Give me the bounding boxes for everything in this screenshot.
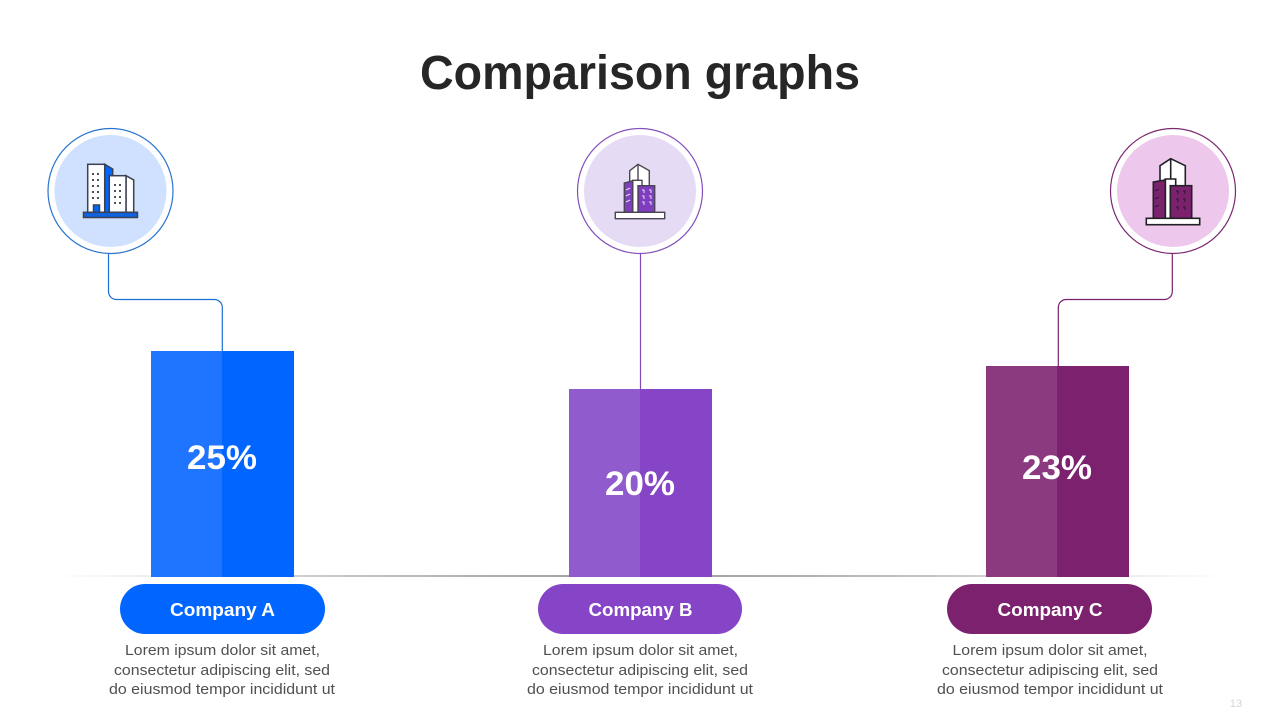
panel: company B: [527, 128, 753, 698]
icon: buildings C: [1146, 159, 1200, 225]
bar B: 20%: [605, 465, 675, 503]
description C: do eiusmod tempor incididunt ut: [937, 682, 1163, 698]
connector A: [108, 254, 222, 351]
label pill A: Company A: [170, 600, 275, 620]
description B: do eiusmod tempor incididunt ut: [527, 682, 753, 698]
title: Comparison graphs: [420, 47, 860, 100]
baseline: [55, 575, 1225, 577]
label pill B: Company B: [588, 600, 692, 620]
panel: company A: [48, 128, 335, 698]
description A: consectetur adipiscing elit, sed: [114, 663, 330, 679]
description C: [937, 643, 1163, 698]
connector C: [1058, 254, 1172, 366]
bar A: 25%: [187, 439, 257, 477]
description A: Lorem ipsum dolor sit amet,: [125, 643, 320, 659]
panel: company C: [937, 128, 1236, 698]
icon circle A: [48, 128, 173, 254]
icon: buildings A: [84, 164, 138, 218]
label pill B: [538, 584, 742, 634]
label pill A: [120, 584, 325, 634]
icon: buildings B: [615, 164, 665, 219]
description C: consectetur adipiscing elit, sed: [942, 663, 1158, 679]
description C: Lorem ipsum dolor sit amet,: [952, 643, 1148, 659]
page number: 13: [1230, 698, 1242, 710]
bar A: [151, 351, 294, 577]
label pill C: Company C: [998, 600, 1102, 620]
connector B: [640, 254, 642, 389]
description A: do eiusmod tempor incididunt ut: [109, 682, 335, 698]
description B: Lorem ipsum dolor sit amet,: [543, 643, 738, 659]
bar B: [569, 389, 712, 577]
description B: consectetur adipiscing elit, sed: [532, 663, 748, 679]
bar C: [986, 366, 1129, 577]
label pill C: [947, 584, 1152, 634]
icon circle B: [578, 128, 702, 254]
bar C: 23%: [1022, 449, 1092, 487]
description A: [109, 643, 335, 698]
description B: [527, 643, 753, 698]
icon circle C: [1110, 128, 1236, 254]
